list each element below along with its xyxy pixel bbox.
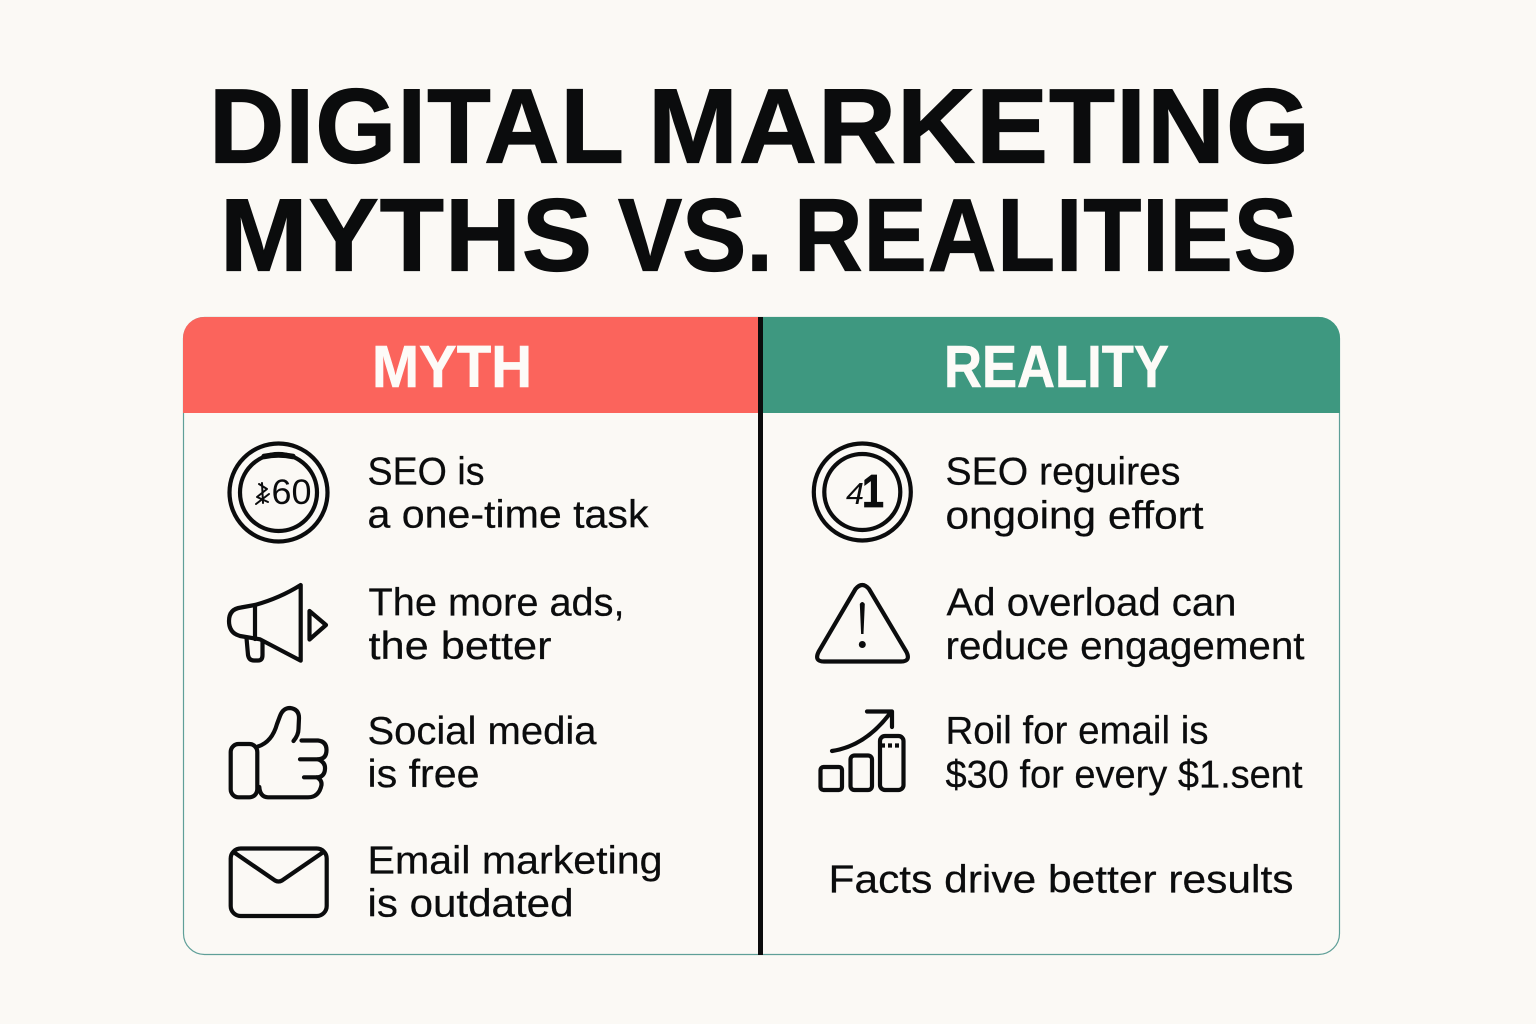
text: myth 2: the better <box>368 625 552 668</box>
icon: number badge: 1 <box>862 465 884 517</box>
text: myth 3 <box>368 710 597 796</box>
text: myth 3: Social media <box>368 710 597 753</box>
title: VS. <box>618 178 773 292</box>
text: reality 1: SEO reguires <box>946 450 1180 494</box>
icon: thumbs up <box>231 708 326 797</box>
text: reality 2: Ad overload can <box>946 582 1236 624</box>
text: myth 4 <box>368 840 662 926</box>
text: myth 4: is outdated <box>368 882 574 926</box>
icon: warning triangle <box>817 585 908 662</box>
text: reality 3: Roil for email is <box>946 710 1208 752</box>
panel: reality column <box>814 444 1305 902</box>
text: myth 3: is free <box>368 753 480 796</box>
text: myth 2 <box>368 582 624 668</box>
icon: growth chart <box>820 712 904 790</box>
icon: envelope <box>231 848 327 916</box>
panel: myth header: MYTH <box>372 334 532 400</box>
icon: price badge <box>230 444 328 542</box>
text: reality 2 <box>946 582 1305 668</box>
title: MARKETING <box>648 68 1311 186</box>
text: reality 3 <box>946 710 1303 796</box>
text: conclusion: Facts drive better results <box>828 858 1294 902</box>
text: reality 3: $30 for every $1.sent <box>946 754 1303 796</box>
comparison table <box>183 317 1340 955</box>
panel: reality header <box>763 317 1340 413</box>
icon: price badge: 60 <box>272 473 312 512</box>
panel: myth column <box>229 444 662 926</box>
panel: myth header <box>183 317 758 413</box>
text: myth 1: SEO is <box>368 450 484 494</box>
text: reality 2: reduce engagement <box>946 625 1305 668</box>
text: myth 1: a one-time task <box>368 494 649 536</box>
text: myth 4: Email marketing <box>368 840 662 882</box>
icon: megaphone <box>229 585 326 661</box>
column divider <box>758 317 763 955</box>
icon: number badge <box>814 444 911 540</box>
text: myth 1 <box>368 450 649 536</box>
title <box>209 68 1311 292</box>
icon: number badge: 4 <box>846 476 864 511</box>
text: myth 2: The more ads, <box>368 582 624 624</box>
text: reality 1: ongoing effort <box>946 494 1204 538</box>
title: REALITIES <box>794 178 1298 292</box>
title: MYTHS <box>220 178 593 292</box>
title: DIGITAL <box>209 68 625 186</box>
panel: reality header: REALITY <box>944 334 1169 400</box>
text: reality 1 <box>946 450 1204 538</box>
